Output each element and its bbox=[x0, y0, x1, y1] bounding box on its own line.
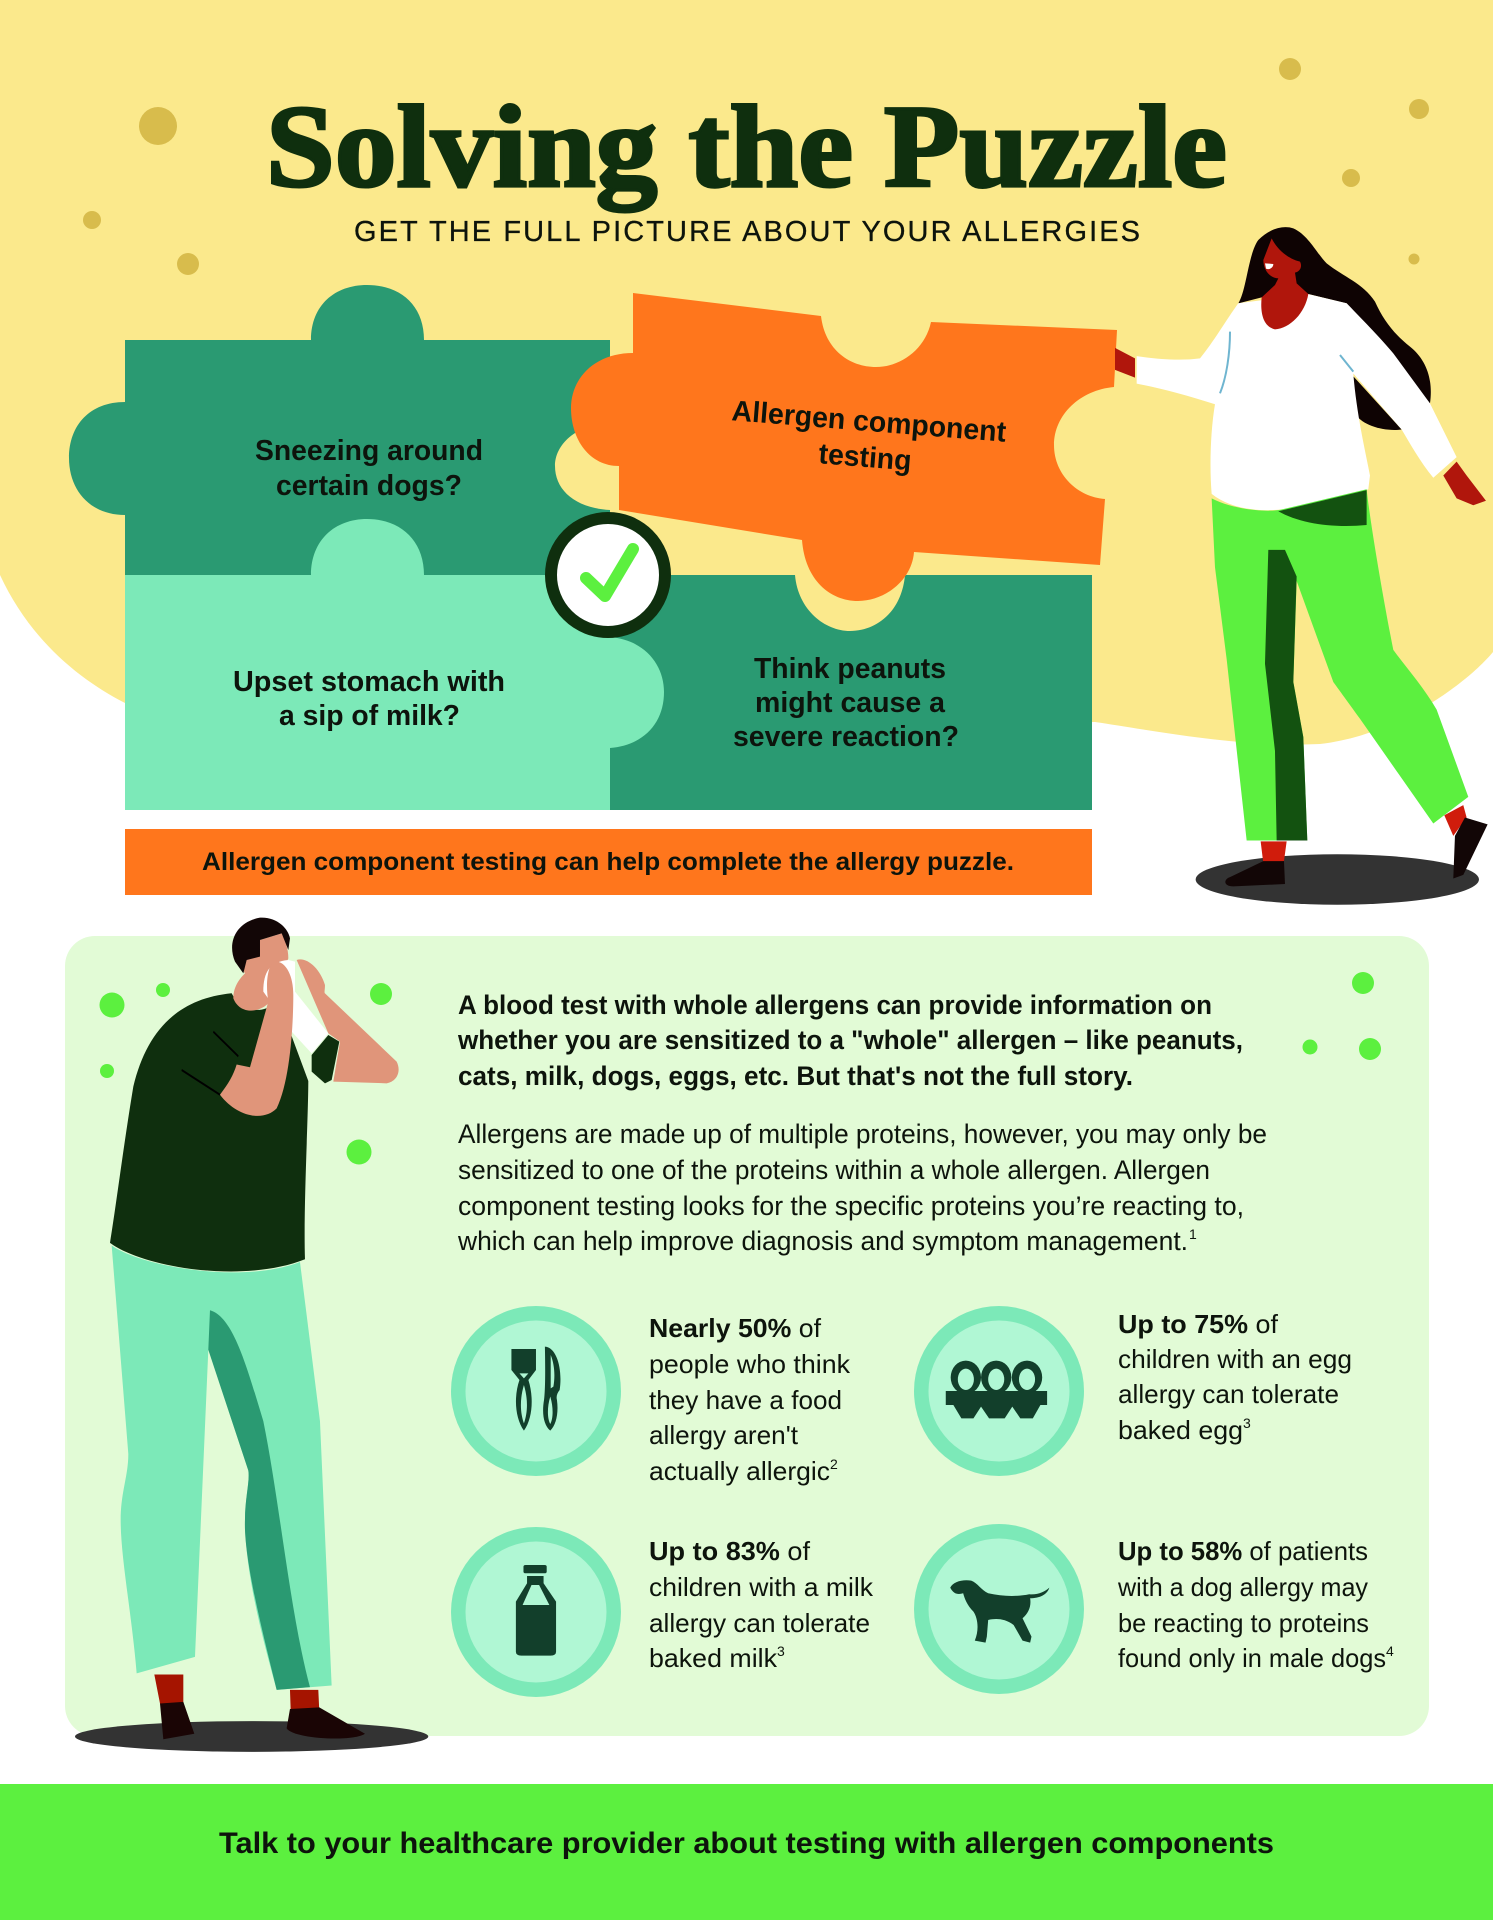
puzzle label: upset stomach: Upset stomach with bbox=[233, 666, 505, 698]
icon: milk bottle badge bbox=[451, 1527, 621, 1697]
stat: up to 83%: Up to 83% of bbox=[649, 1536, 811, 1566]
stat: up to 58% bbox=[1117, 1536, 1394, 1673]
illustration: man sneezing into tissue bbox=[75, 918, 428, 1752]
stat: up to 58%: be reacting to proteins bbox=[1118, 1608, 1369, 1638]
text block: bold intro: cats, milk, dogs, eggs, etc. But that's not the full story. bbox=[458, 1061, 1133, 1091]
stat: up to 75%: children with an egg bbox=[1118, 1344, 1352, 1374]
stat: nearly 50%: they have a food bbox=[649, 1385, 842, 1415]
puzzle piece: allergen component testing bbox=[571, 293, 1117, 601]
puzzle label: peanuts: Think peanuts bbox=[754, 653, 946, 685]
decorative green dots bbox=[100, 972, 1381, 1164]
stat: up to 75%: Up to 75% of bbox=[1118, 1309, 1279, 1339]
puzzle piece: peanuts bbox=[610, 575, 1092, 810]
stat: up to 58%: found only in male dogs bbox=[1118, 1643, 1386, 1673]
puzzle bbox=[69, 285, 1117, 810]
text block: bold intro bbox=[457, 990, 1243, 1091]
text block: explanation: Allergens are made up of multiple proteins, however, you may only be bbox=[458, 1119, 1267, 1149]
stat: nearly 50% bbox=[649, 1313, 851, 1486]
footer call to action bbox=[0, 1784, 1493, 1920]
stat: up to 83%: 3 bbox=[777, 1643, 785, 1659]
footer call to action: Talk to your healthcare provider about testing with allergen components bbox=[219, 1827, 1274, 1860]
text block: bold intro: whether you are sensitized to a "whole" allergen – like peanuts, bbox=[457, 1025, 1243, 1055]
stat: up to 75%: 3 bbox=[1243, 1415, 1251, 1431]
puzzle label: allergen component testing: testing bbox=[817, 438, 913, 477]
text block: explanation bbox=[457, 1119, 1267, 1256]
stat: up to 75% bbox=[1118, 1309, 1352, 1445]
puzzle label: upset stomach: a sip of milk? bbox=[279, 700, 460, 732]
illustration: woman holding puzzle piece bbox=[1115, 227, 1488, 905]
text block: explanation: which can help improve diagnosis and symptom management. bbox=[457, 1226, 1188, 1256]
stat: up to 75%: baked egg bbox=[1118, 1415, 1243, 1445]
puzzle label: allergen component testing bbox=[728, 395, 1008, 485]
orange banner bbox=[125, 829, 1092, 895]
stat: up to 83% bbox=[649, 1536, 874, 1673]
text block: explanation: 1 bbox=[1189, 1226, 1197, 1242]
stat: nearly 50%: allergy aren't bbox=[649, 1420, 799, 1450]
stat: nearly 50%: actually allergic bbox=[649, 1456, 830, 1486]
stat: up to 83%: allergy can tolerate bbox=[649, 1608, 870, 1638]
stat: up to 83%: baked milk bbox=[649, 1643, 778, 1673]
puzzle label: peanuts: might cause a bbox=[755, 687, 946, 719]
subtitle: GET THE FULL PICTURE ABOUT YOUR ALLERGIES bbox=[354, 216, 1140, 248]
stat: nearly 50%: people who think bbox=[649, 1349, 851, 1379]
puzzle label: allergen component testing: Allergen component bbox=[731, 395, 1008, 449]
text block: explanation: sensitized to one of the proteins within a whole allergen. Allergen bbox=[458, 1155, 1210, 1185]
puzzle label: sneezing bbox=[255, 435, 483, 502]
stat: up to 75%: allergy can tolerate bbox=[1118, 1379, 1339, 1409]
puzzle label: sneezing: certain dogs? bbox=[276, 470, 462, 502]
puzzle label: peanuts: severe reaction? bbox=[733, 721, 959, 753]
stat: up to 83%: children with a milk bbox=[649, 1572, 874, 1602]
panel: allergen information bbox=[65, 936, 1429, 1736]
puzzle piece: sneezing around dogs bbox=[69, 285, 610, 575]
text block: bold intro: A blood test with whole allergens can provide information on bbox=[458, 990, 1212, 1020]
stat: nearly 50%: Nearly 50% of bbox=[649, 1313, 822, 1343]
icon: fork and knife badge bbox=[451, 1306, 621, 1476]
title: Solving the Puzzle bbox=[266, 81, 1227, 212]
puzzle label: sneezing: Sneezing around bbox=[255, 435, 483, 467]
stat: nearly 50%: 2 bbox=[830, 1456, 838, 1472]
text block: explanation: component testing looks for the specific proteins you’re reacting to, bbox=[458, 1191, 1244, 1221]
stat: up to 58%: with a dog allergy may bbox=[1117, 1572, 1368, 1602]
icon: check mark badge bbox=[551, 518, 665, 632]
orange banner: Allergen component testing can help complete the allergy puzzle. bbox=[202, 848, 1014, 876]
stat: up to 58%: 4 bbox=[1386, 1643, 1394, 1659]
puzzle label: peanuts bbox=[733, 653, 959, 753]
stat: up to 58%: Up to 58% of patients bbox=[1118, 1536, 1368, 1566]
icon: dog badge bbox=[914, 1524, 1084, 1694]
icon: egg carton badge bbox=[914, 1306, 1084, 1476]
decorative yellow dots bbox=[83, 58, 1429, 275]
puzzle piece: upset stomach bbox=[125, 519, 664, 810]
yellow background shape bbox=[0, 0, 1493, 745]
puzzle label: upset stomach bbox=[233, 666, 505, 732]
